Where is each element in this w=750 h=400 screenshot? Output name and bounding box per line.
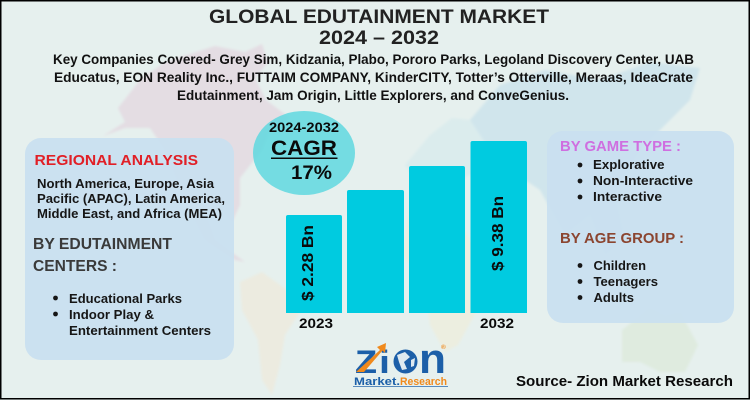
text: regions: [37, 176, 225, 221]
bar chart: [286, 141, 527, 331]
title: 2024 – 2032: [319, 28, 439, 49]
axis label: 2032: 2032: [480, 315, 514, 331]
list: edutainment centers: Indoor Play &: [69, 307, 154, 322]
bar: 2023: [286, 215, 342, 313]
panel: game type and age group: [547, 131, 734, 323]
logo: Zion Market Research: Research: [400, 376, 447, 388]
list: edutainment centers: Educational Parks: [69, 291, 182, 306]
bar: intermediate year 1: [347, 190, 404, 313]
list: age groups: Teenagers: [594, 274, 658, 289]
callout: CAGR: 2024-2032: [269, 120, 339, 135]
list: edutainment centers: [53, 291, 211, 338]
text: regions: Middle East, and Africa (MEA): [37, 206, 222, 221]
list: game types: [578, 157, 693, 204]
icon: registered mark: ®: [441, 343, 446, 351]
bar: 2032: [470, 141, 527, 313]
list: game types: Explorative: [593, 157, 664, 172]
heading: by edutainment centers: BY EDUTAINMENT: [33, 236, 173, 253]
logo: Zion Market Research: Z: [355, 344, 377, 380]
logo: Zion Market Research: [353, 335, 448, 388]
title: [209, 7, 549, 49]
callout: CAGR: [253, 111, 355, 195]
text: regions: North America, Europe, Asia: [37, 176, 215, 191]
callout: CAGR: 17%: [291, 163, 332, 184]
logo: Zion Market Research: i: [379, 344, 390, 380]
heading: by age group: BY AGE GROUP :: [560, 230, 684, 247]
text: key companies covered: [53, 52, 694, 103]
heading: by edutainment centers: CENTERS :: [33, 258, 117, 275]
title: GLOBAL EDUTAINMENT MARKET: [209, 7, 549, 28]
text: regions: Pacific (APAC), Latin America,: [37, 191, 225, 206]
icon: globe: [394, 350, 418, 374]
heading: regional analysis: REGIONAL ANALYSIS: [34, 152, 198, 169]
axis label: 2023: 2023: [299, 315, 333, 331]
list: edutainment centers: Entertainment Centers: [69, 323, 211, 338]
text: key companies covered: Edutainment, Jam Origin, Little Explorers, and ConveGenius.: [177, 88, 569, 103]
callout: CAGR: CAGR: [271, 137, 337, 160]
text: key companies covered: Key Companies Covered- Grey Sim, Kidzania, Plabo, Pororo Parks, Legoland Discovery Center, UAB: [53, 52, 694, 67]
bar: intermediate year 2: [409, 166, 465, 313]
list: age groups: [578, 258, 658, 305]
heading: by game type: BY GAME TYPE :: [560, 138, 681, 155]
bar value: 2032: $ 9.38 Bn: [490, 196, 507, 271]
list: age groups: Adults: [594, 290, 634, 305]
text: key companies covered: Educatus, EON Reality Inc., FUTTAIM COMPANY, KinderCITY, Totter’s Otterville, Meraas, IdeaCrate: [54, 70, 693, 85]
background world map: [103, 44, 700, 395]
list: age groups: Children: [594, 258, 646, 273]
heading: by edutainment centers: [33, 236, 173, 275]
icon: orange arrow: [356, 343, 386, 372]
bar value: 2023: $ 2.28 Bn: [300, 225, 317, 301]
list: game types: Non-Interactive: [593, 173, 693, 188]
panel: regional analysis and edutainment centers: [25, 138, 234, 360]
source note: Source- Zion Market Research: [516, 374, 733, 390]
logo: Zion Market Research: n: [419, 335, 446, 382]
logo: Zion Market Research: Market.: [354, 376, 400, 388]
list: game types: Interactive: [593, 189, 662, 204]
